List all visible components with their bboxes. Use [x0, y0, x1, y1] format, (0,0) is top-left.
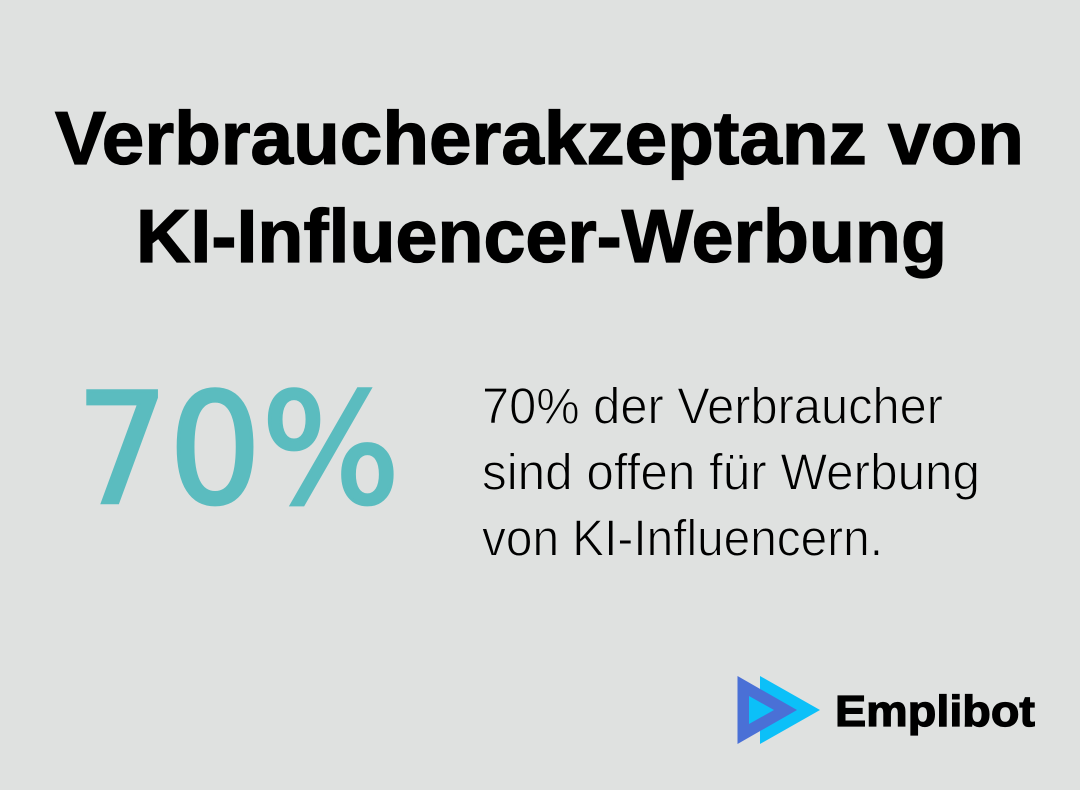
- description text: 70% der Verbraucher: [482, 378, 943, 434]
- logo wordmark: Emplibot: [835, 687, 1035, 736]
- title: KI-Influencer-Werbung: [136, 194, 947, 278]
- description text: von KI-Influencern.: [482, 510, 883, 566]
- icon: play triangles: [738, 676, 820, 744]
- logo: Emplibot: [738, 676, 1035, 744]
- title: [55, 96, 1024, 278]
- title: Verbraucherakzeptanz von: [55, 96, 1024, 180]
- description text: sind offen für Werbung: [482, 444, 980, 500]
- big statistic: 70%: 70%: [76, 362, 400, 540]
- description text: [482, 378, 980, 566]
